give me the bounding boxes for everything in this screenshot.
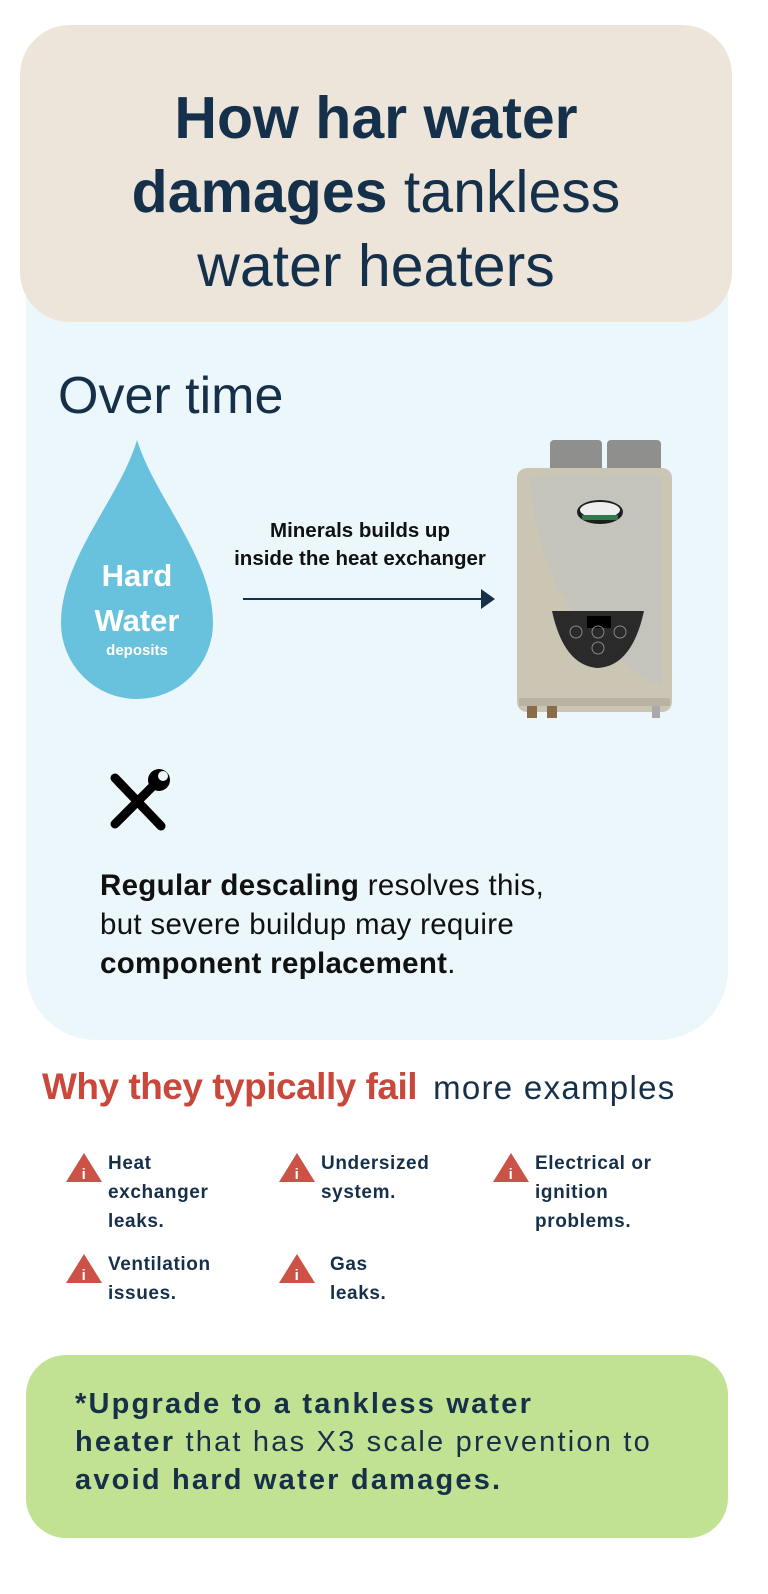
item: ventilation: Ventilation xyxy=(108,1254,211,1275)
callout: upgrade: heater that has X3 scale prevention to xyxy=(75,1426,652,1458)
callout: upgrade: *Upgrade to a tankless water xyxy=(75,1388,533,1420)
list: failures: i xyxy=(82,1267,86,1284)
heading: why they fail: Why they typically fail more examples xyxy=(42,1066,676,1107)
item: electrical: Electrical or xyxy=(535,1153,652,1174)
item: undersized xyxy=(279,1153,429,1203)
item: ventilation: issues. xyxy=(108,1283,177,1304)
caption: minerals xyxy=(234,519,486,570)
item: undersized: Undersized xyxy=(321,1153,429,1174)
icon: tools xyxy=(110,769,170,830)
text: descaling xyxy=(100,869,544,980)
item: ventilation xyxy=(66,1254,211,1304)
title: damages tankless xyxy=(132,159,620,225)
list: failures: i xyxy=(82,1166,86,1183)
item: heat exchanger xyxy=(66,1153,208,1232)
list: failures xyxy=(66,1153,652,1304)
panel: over time xyxy=(26,200,728,1040)
item: heat exchanger: Heat xyxy=(108,1153,152,1174)
list: failures: i xyxy=(295,1267,299,1284)
item: heat exchanger: exchanger xyxy=(108,1182,208,1203)
text: descaling: but severe buildup may require xyxy=(100,908,514,941)
title: water heaters xyxy=(197,233,555,299)
icon: water drop: Water xyxy=(95,603,179,638)
item: gas leaks: Gas xyxy=(330,1254,368,1275)
icon: water drop: Hard xyxy=(102,558,172,593)
icon: water drop xyxy=(61,440,213,699)
item: electrical: problems. xyxy=(535,1211,631,1232)
item: electrical: ignition xyxy=(535,1182,608,1203)
list: failures: i xyxy=(295,1166,299,1183)
item: electrical xyxy=(493,1153,652,1232)
icon: water drop: deposits xyxy=(106,642,168,659)
caption: minerals: inside the heat exchanger xyxy=(234,547,486,570)
callout: upgrade: avoid hard water damages. xyxy=(75,1464,502,1496)
callout: upgrade xyxy=(26,1355,728,1538)
item: undersized: system. xyxy=(321,1182,396,1203)
item: gas leaks xyxy=(279,1254,386,1304)
heading: over time: Over time xyxy=(58,367,283,425)
item: heat exchanger: leaks. xyxy=(108,1211,164,1232)
text: descaling: Regular descaling resolves this, xyxy=(100,869,544,902)
text: descaling: component replacement. xyxy=(100,947,456,980)
title panel xyxy=(20,25,732,322)
title: How har water xyxy=(174,85,578,151)
icon: water heater xyxy=(517,440,672,718)
list: failures: i xyxy=(509,1166,513,1183)
caption: minerals: Minerals builds up xyxy=(270,519,450,542)
title xyxy=(132,85,620,299)
arrow xyxy=(243,589,495,609)
item: gas leaks: leaks. xyxy=(330,1283,386,1304)
